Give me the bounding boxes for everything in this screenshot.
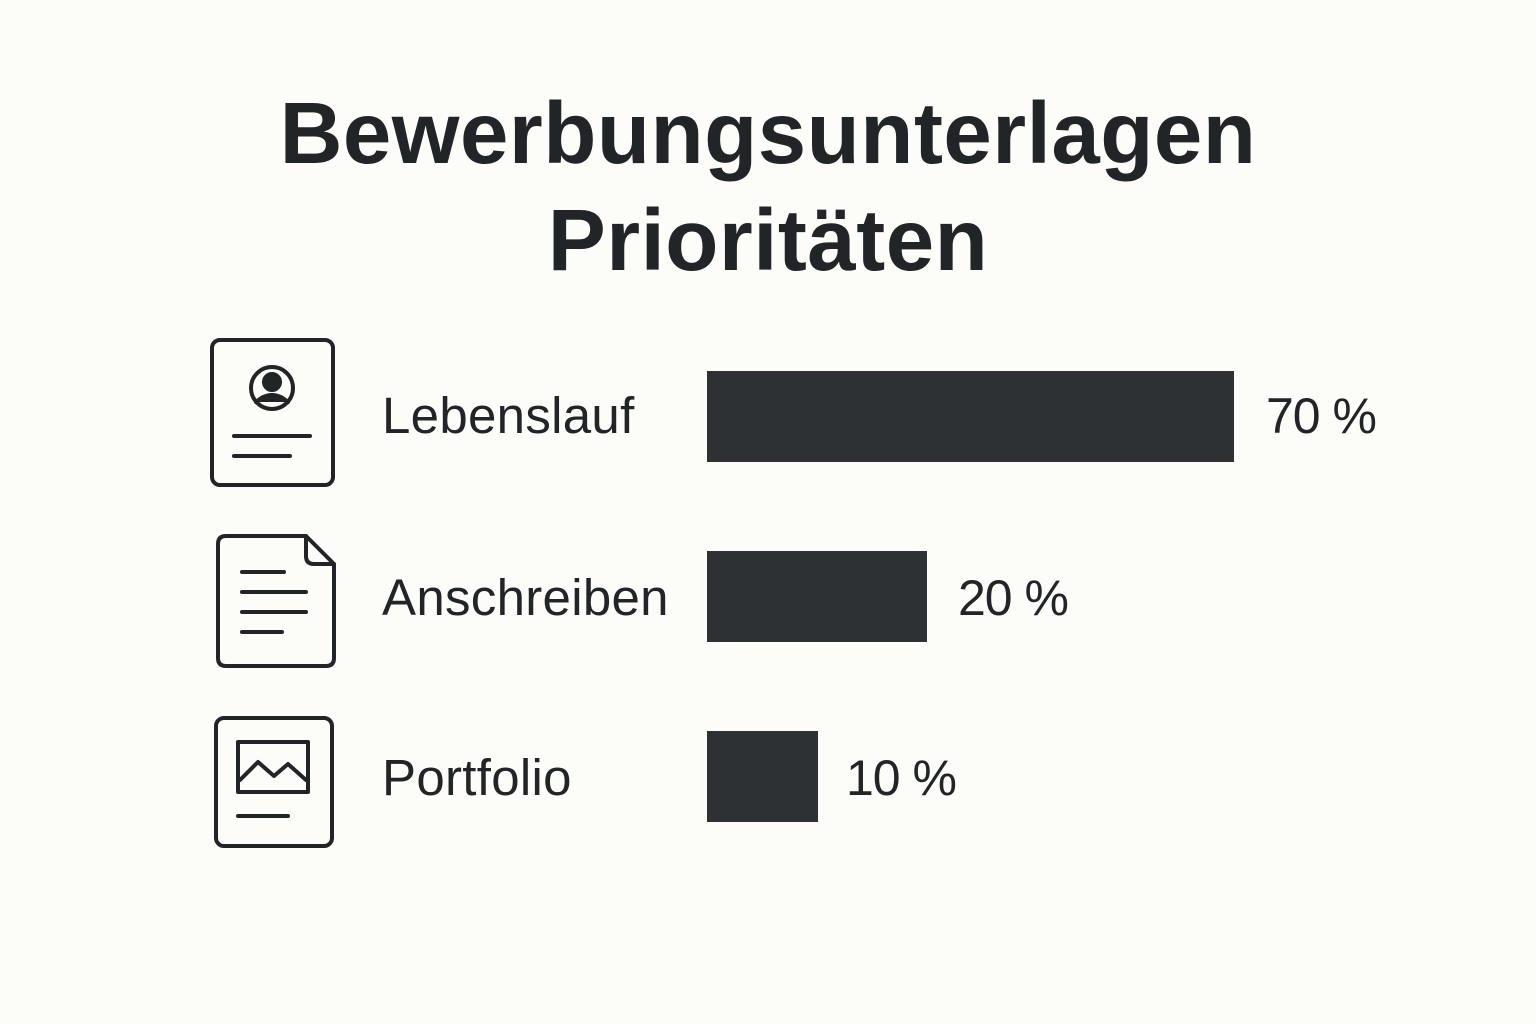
value: 20 %: 20 % xyxy=(958,570,1068,626)
label: Portfolio: Portfolio xyxy=(382,749,572,806)
icon: portfolio xyxy=(214,716,334,848)
bar: Anschreiben xyxy=(707,551,927,642)
icon: letter xyxy=(216,534,336,668)
label: Anschreiben: Anschreiben xyxy=(382,569,669,626)
label: Lebenslauf: Lebenslauf xyxy=(382,387,635,444)
icon: CV xyxy=(210,338,335,487)
title: Prioritäten xyxy=(548,192,988,289)
value: 70 %: 70 % xyxy=(1266,388,1376,444)
value: 10 %: 10 % xyxy=(846,750,956,806)
title: Bewerbungsunterlagen xyxy=(280,85,1256,182)
bar: Portfolio xyxy=(707,731,818,822)
title xyxy=(280,85,1256,289)
bar: Lebenslauf xyxy=(707,371,1234,462)
